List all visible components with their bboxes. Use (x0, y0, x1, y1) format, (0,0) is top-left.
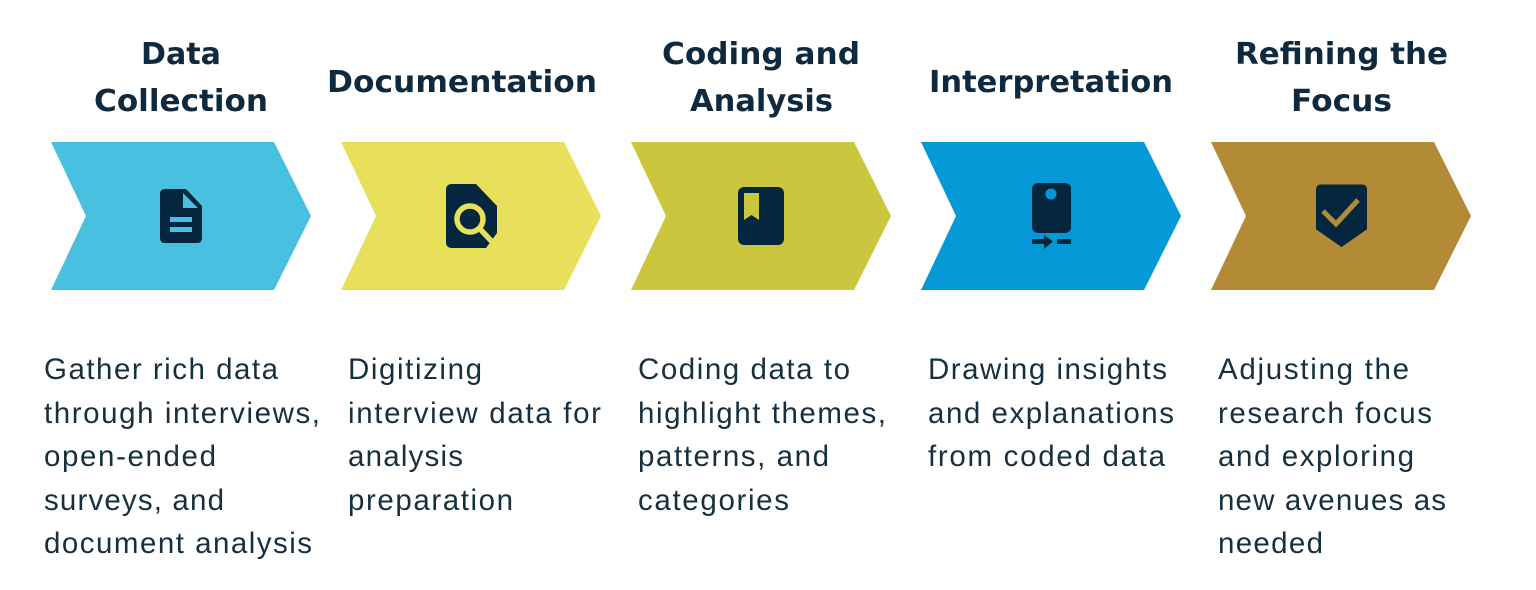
description: documentation: preparation (348, 484, 513, 517)
heading: refining the focus: Refining the (1235, 37, 1448, 72)
description: documentation: analysis (348, 440, 463, 473)
icon: document (160, 189, 202, 243)
icon: shield check (1316, 185, 1366, 246)
heading: interpretation: Interpretation (929, 65, 1173, 100)
heading: data collection (94, 37, 268, 119)
description: coding and analysis: highlight themes, (638, 397, 886, 430)
step 4: interpretation (921, 65, 1181, 473)
description: data collection: open-ended (44, 440, 216, 473)
description: data collection (44, 353, 320, 560)
description: interpretation: Drawing insights (928, 353, 1167, 386)
description: refining the focus (1218, 353, 1446, 560)
description: data collection: through interviews, (44, 397, 320, 430)
description: refining the focus: and exploring (1218, 440, 1414, 473)
description: interpretation: from coded data (928, 440, 1166, 473)
heading: data collection: Data (141, 37, 221, 72)
chevron: interpretation (921, 142, 1181, 290)
description: data collection: document analysis (44, 527, 312, 560)
step 5: refining the focus (1211, 37, 1471, 560)
step 2: documentation (327, 65, 601, 517)
heading: coding and analysis: Coding and (662, 37, 860, 72)
chevron: refining the focus (1211, 142, 1471, 290)
description: coding and analysis: Coding data to (638, 353, 850, 386)
icon: device with arrow (1032, 183, 1071, 249)
description: refining the focus: research focus (1218, 397, 1432, 430)
description: refining the focus: Adjusting the (1218, 353, 1409, 386)
description: data collection: surveys, and (44, 484, 224, 517)
icon: magnifier document (446, 184, 497, 248)
description: coding and analysis (638, 353, 886, 517)
chevron: data collection (51, 142, 311, 290)
chevron: coding and analysis (631, 142, 891, 290)
description: documentation: Digitizing (348, 353, 482, 386)
description: coding and analysis: patterns, and (638, 440, 829, 473)
step 3: coding and analysis (631, 37, 891, 517)
heading: refining the focus (1235, 37, 1448, 119)
description: interpretation (928, 353, 1174, 473)
description: refining the focus: new avenues as (1218, 484, 1446, 517)
description: interpretation: and explanations (928, 397, 1174, 430)
heading: coding and analysis: Analysis (690, 84, 833, 119)
description: coding and analysis: categories (638, 484, 789, 517)
icon: bookmark book (738, 187, 784, 245)
heading: documentation: Documentation (327, 65, 597, 100)
description: documentation (348, 353, 601, 517)
step 1: data collection (44, 37, 320, 560)
description: documentation: interview data for (348, 397, 601, 430)
heading: data collection: Collection (94, 84, 268, 119)
heading: refining the focus: Focus (1291, 84, 1392, 119)
description: data collection: Gather rich data (44, 353, 279, 386)
description: refining the focus: needed (1218, 527, 1323, 560)
heading: coding and analysis (662, 37, 860, 119)
chevron: documentation (341, 142, 601, 290)
